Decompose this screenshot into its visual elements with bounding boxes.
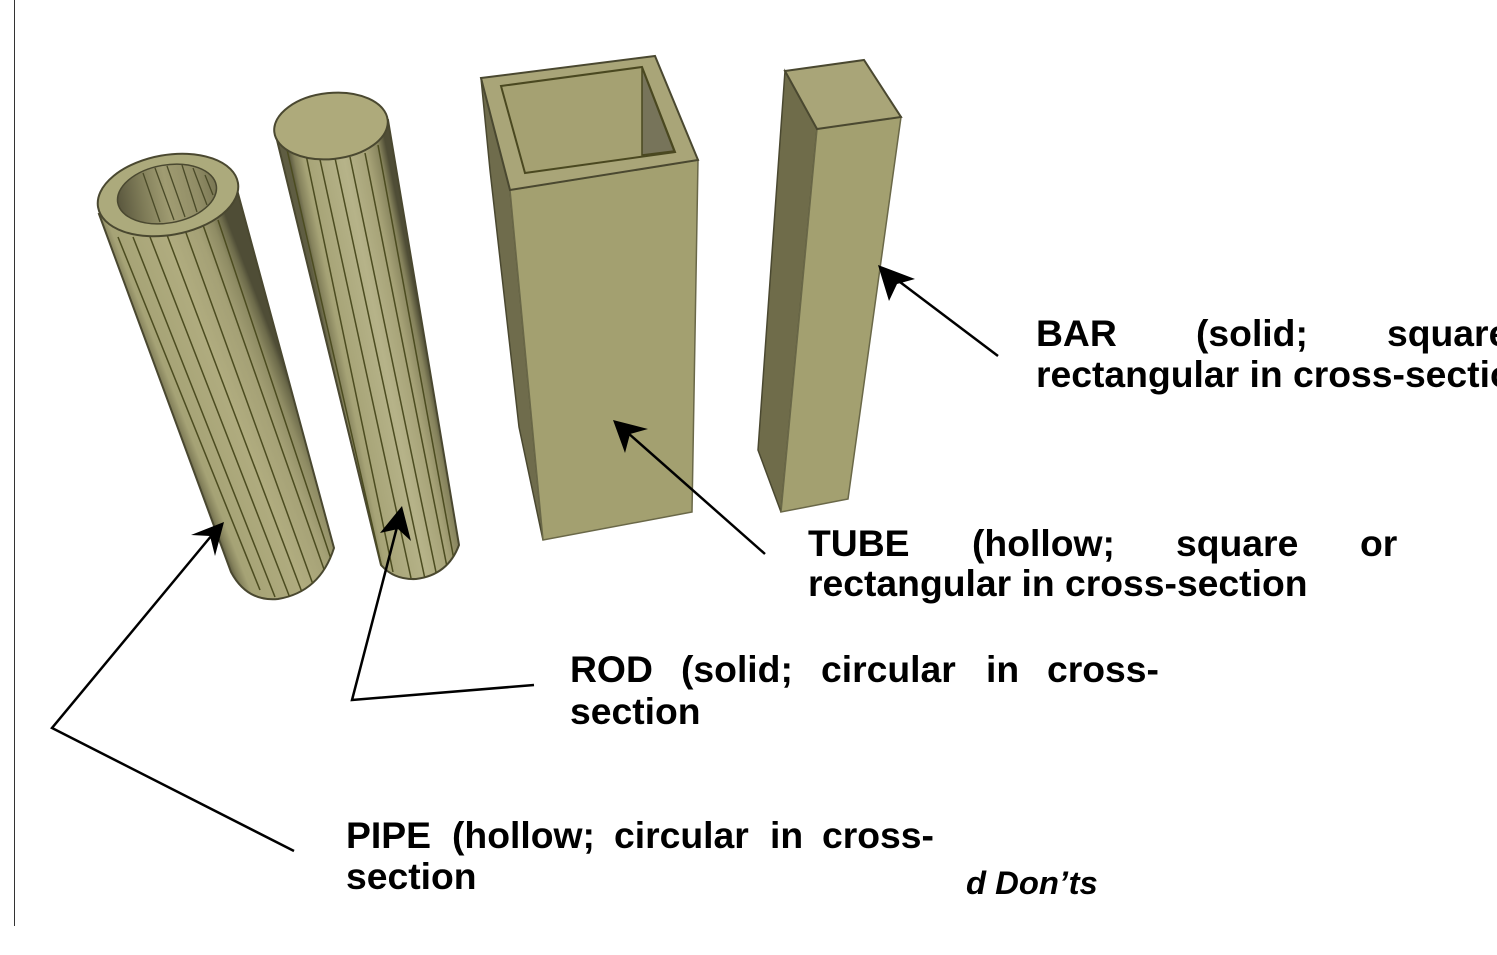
arrow: rod (352, 506, 534, 700)
label: pipe: section (346, 855, 477, 897)
pipe top ring (91, 143, 245, 247)
label: bar: BAR (1036, 312, 1117, 354)
label: pipe: PIPE (346, 814, 431, 856)
bar top face (785, 60, 901, 129)
tube front face (510, 160, 698, 540)
illustration: tube (481, 56, 698, 540)
rod ribs (286, 145, 454, 579)
illustration: rod (271, 87, 459, 579)
pipe hollow interior (113, 157, 221, 231)
tube top rim (481, 56, 698, 190)
label: rod: cross- (1047, 648, 1159, 690)
tube inner wall (501, 67, 675, 173)
label: rod: section (570, 690, 701, 732)
label: pipe: circular (614, 814, 749, 856)
tube left side (481, 78, 543, 540)
rod top face (271, 87, 391, 165)
label: tube: rectangular in cross-section (808, 562, 1308, 604)
label: tube: square (1176, 522, 1298, 564)
label: rod: circular (821, 648, 956, 690)
label: pipe: cross- (822, 814, 934, 856)
label: pipe: (hollow; (452, 814, 595, 856)
arrow: tube (613, 420, 765, 554)
label: rod: in (986, 648, 1019, 690)
arrow: bar (878, 265, 998, 356)
arrow: pipe (52, 522, 294, 851)
page edge line (14, 0, 16, 926)
label: rod: (solid; (681, 648, 793, 690)
text fragment: d Don’ts (966, 864, 1098, 901)
pipe ribs (118, 220, 332, 598)
label: tube: or (1360, 522, 1397, 564)
label: pipe: in (770, 814, 803, 856)
bar front face (781, 117, 901, 512)
label: bar: (solid; (1196, 312, 1308, 354)
label: tube: TUBE (808, 522, 910, 564)
tube inner shadow (642, 68, 674, 155)
label: rod: ROD (570, 648, 653, 690)
label: tube: (hollow; (972, 522, 1115, 564)
illustration: pipe (91, 143, 334, 599)
bar left side (758, 71, 817, 512)
illustration: bar (758, 60, 901, 512)
